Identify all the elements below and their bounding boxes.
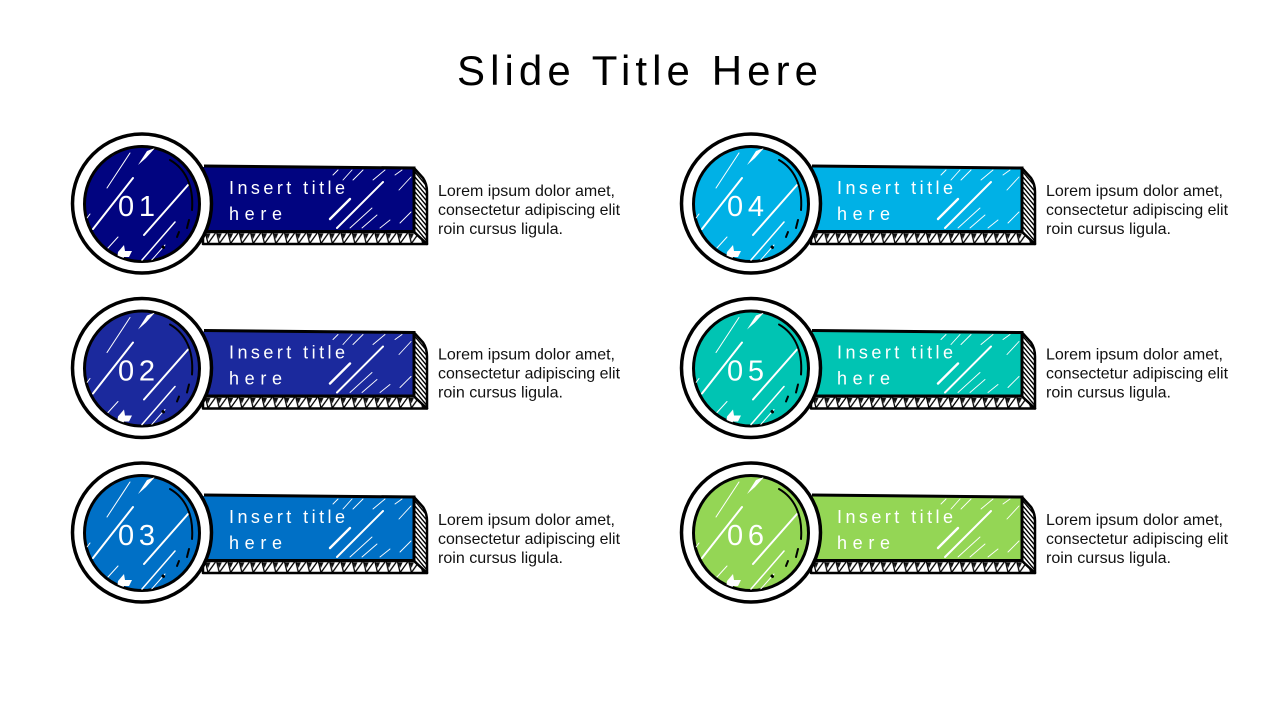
heading 04: Insert title bbox=[837, 178, 953, 198]
panel: item 05 bbox=[682, 298, 1229, 438]
text block 06: consectetur adipiscing elit bbox=[1046, 531, 1229, 548]
heading 03: here bbox=[229, 533, 282, 553]
badge 02 bbox=[72, 298, 212, 438]
text block 03 bbox=[438, 512, 621, 567]
text block 02: Lorem ipsum dolor amet, bbox=[438, 346, 615, 364]
text block 05: consectetur adipiscing elit bbox=[1046, 366, 1229, 382]
badge 05 bbox=[682, 298, 820, 438]
text block 06: Lorem ipsum dolor amet, bbox=[1046, 512, 1223, 529]
text block 04: Lorem ipsum dolor amet, bbox=[1046, 183, 1223, 200]
badge 03 bbox=[72, 463, 212, 602]
text block 03: Lorem ipsum dolor amet, bbox=[438, 512, 615, 529]
label bar 06 bbox=[808, 495, 1035, 573]
badge 01 bbox=[72, 134, 212, 273]
heading 02 bbox=[229, 342, 345, 388]
label bar 02 bbox=[200, 330, 427, 408]
heading 06: here bbox=[837, 533, 890, 553]
number 02: 02 bbox=[118, 356, 155, 388]
heading 04 bbox=[837, 178, 953, 224]
heading 05: here bbox=[837, 368, 890, 388]
label bar 05 bbox=[808, 330, 1035, 408]
number 05: 05 bbox=[727, 356, 764, 388]
heading 03: Insert title bbox=[229, 507, 345, 527]
label bar 01 bbox=[200, 166, 427, 244]
heading 05: Insert title bbox=[837, 342, 953, 362]
heading 01: Insert title bbox=[229, 178, 345, 198]
text block 02 bbox=[438, 346, 621, 402]
heading 01 bbox=[229, 178, 345, 224]
text block 01: Lorem ipsum dolor amet, bbox=[438, 183, 615, 200]
text block 03: consectetur adipiscing elit bbox=[438, 531, 621, 548]
text block 04: consectetur adipiscing elit bbox=[1046, 202, 1229, 219]
text block 04 bbox=[1046, 183, 1229, 238]
heading 03 bbox=[229, 507, 345, 553]
number 06: 06 bbox=[727, 520, 764, 552]
text block 01: roin cursus ligula. bbox=[438, 221, 563, 238]
badge 04 bbox=[682, 134, 820, 273]
text block 05: roin cursus ligula. bbox=[1046, 384, 1171, 402]
label bar 03 bbox=[200, 495, 427, 573]
heading 02: Insert title bbox=[229, 342, 345, 362]
text block 06 bbox=[1046, 512, 1229, 567]
number 01: 01 bbox=[118, 191, 155, 223]
heading 05 bbox=[837, 342, 953, 388]
text block 03: roin cursus ligula. bbox=[438, 550, 563, 567]
number 03: 03 bbox=[118, 520, 155, 552]
panel: item 06 bbox=[682, 463, 1229, 602]
text block 02: roin cursus ligula. bbox=[438, 384, 563, 402]
heading 02: here bbox=[229, 368, 282, 388]
text block 01: consectetur adipiscing elit bbox=[438, 202, 621, 219]
text block 06: roin cursus ligula. bbox=[1046, 550, 1171, 567]
panel: item 01 bbox=[72, 134, 621, 273]
text block 01 bbox=[438, 183, 621, 238]
text block 05: Lorem ipsum dolor amet, bbox=[1046, 346, 1223, 364]
number 04: 04 bbox=[727, 191, 764, 223]
panel: item 03 bbox=[72, 463, 621, 602]
badge 06 bbox=[682, 463, 820, 602]
heading 04: here bbox=[837, 204, 890, 224]
text block 04: roin cursus ligula. bbox=[1046, 221, 1171, 238]
text block 02: consectetur adipiscing elit bbox=[438, 366, 621, 382]
heading 01: here bbox=[229, 204, 282, 224]
heading 06 bbox=[837, 507, 953, 553]
title: Slide Title Here bbox=[457, 47, 818, 94]
panel: item 04 bbox=[682, 134, 1229, 273]
text block 05 bbox=[1046, 346, 1229, 402]
panel: item 02 bbox=[72, 298, 621, 438]
heading 06: Insert title bbox=[837, 507, 953, 527]
label bar 04 bbox=[808, 166, 1035, 244]
